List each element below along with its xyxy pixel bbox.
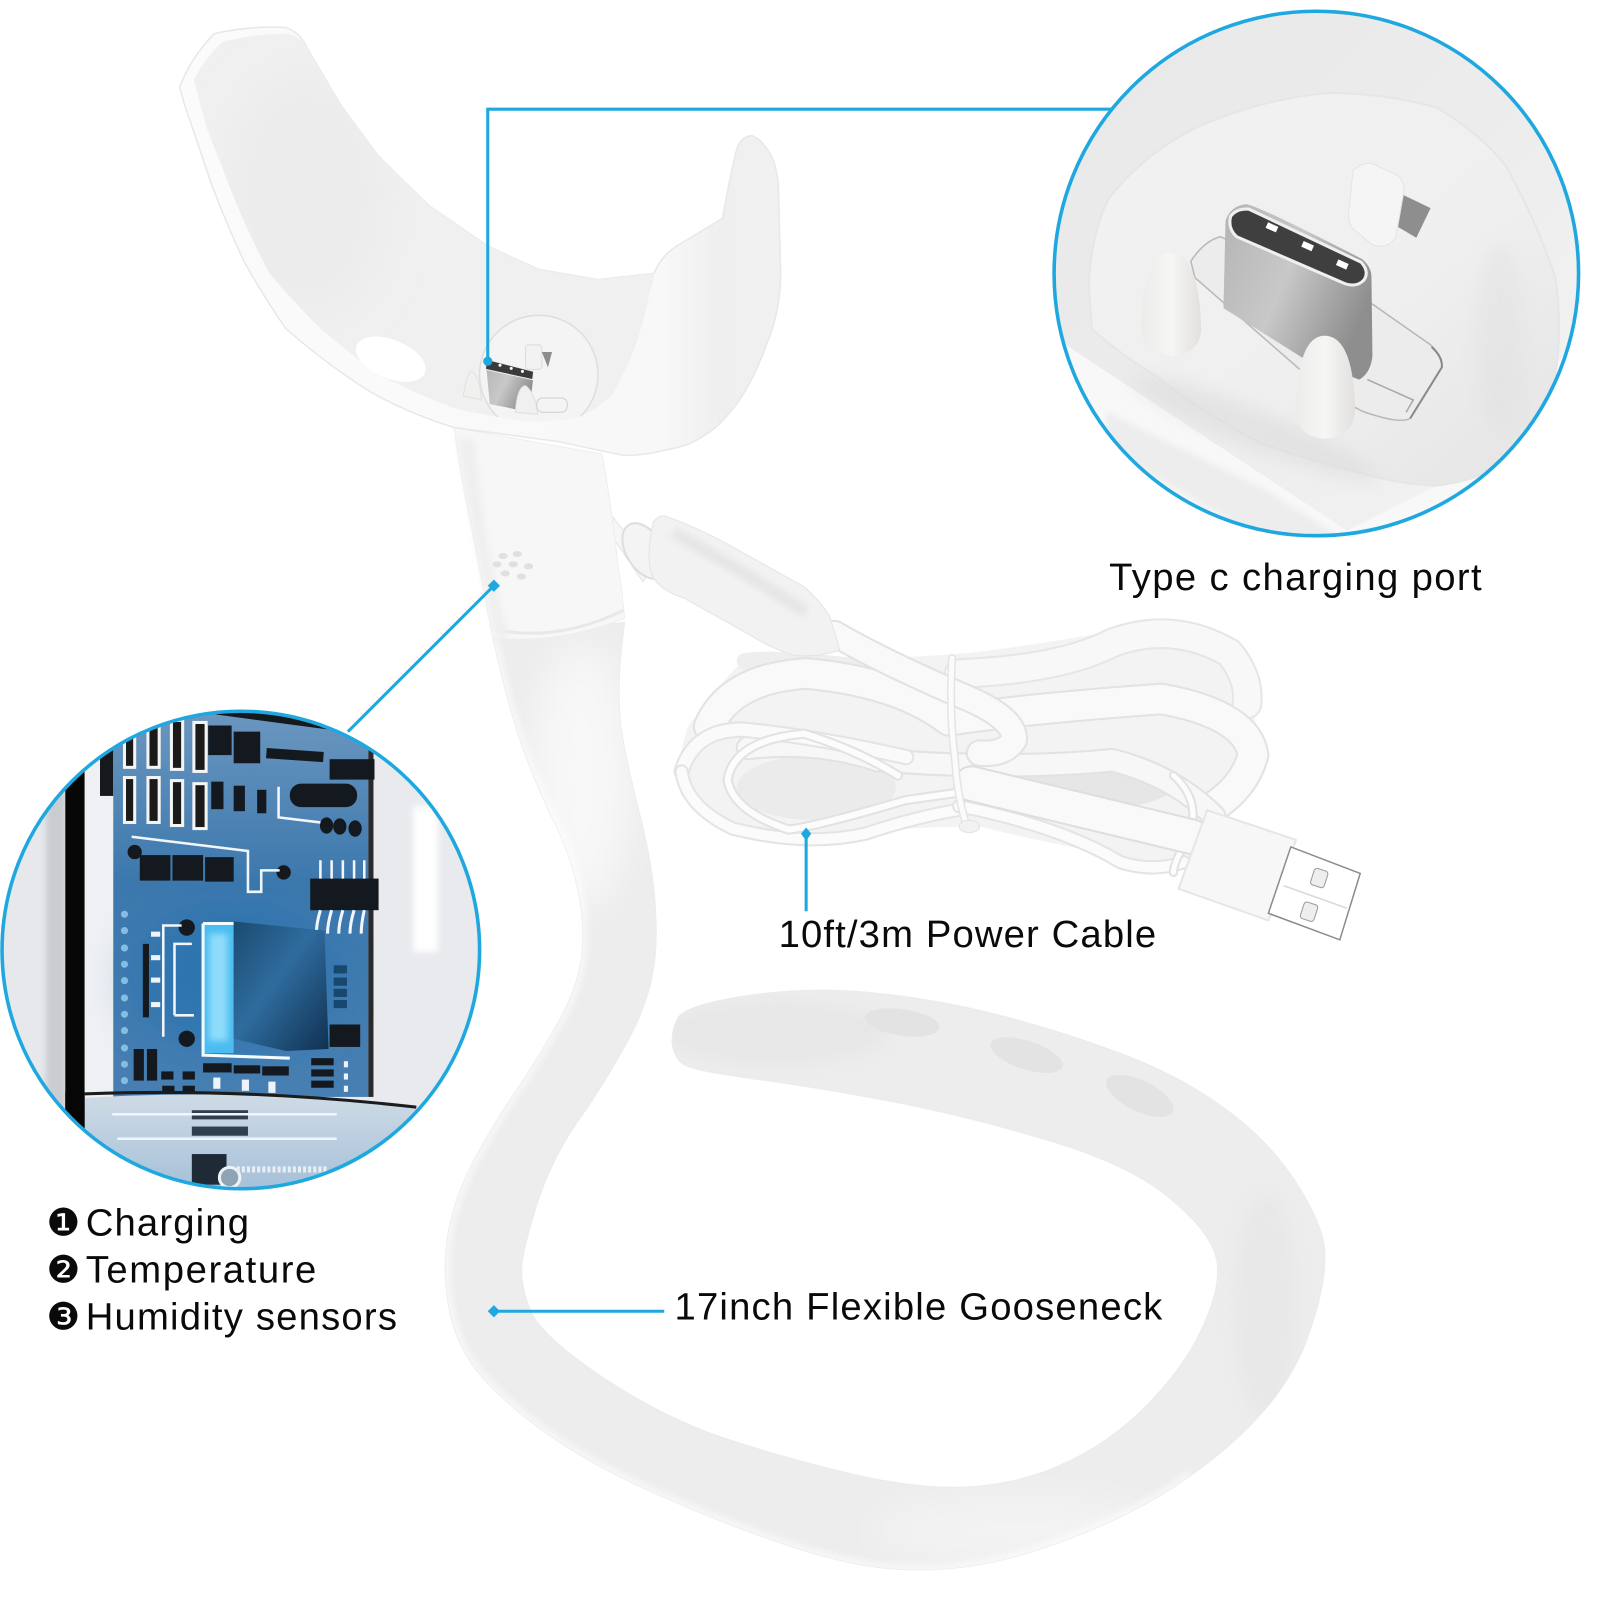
socket plate: [1191, 237, 1442, 420]
cradle oval cutout: [349, 327, 432, 391]
icon: mini guide pins: [463, 371, 567, 414]
PCB capacitor rows: [124, 714, 206, 829]
icon: left guide pin: [1187, 264, 1201, 351]
label list: sensor functions: Charging: [86, 1202, 249, 1245]
icon: mini latch: [526, 345, 552, 369]
PCB white traces: [132, 787, 364, 1037]
product: gooseneck arm: [445, 622, 1325, 1570]
cradle charging hub disc: [479, 314, 598, 417]
PCB white pads: [151, 932, 348, 1093]
product: neck stem: [454, 428, 624, 639]
cradle inner bowl: [194, 34, 653, 417]
label: 10ft/3m Power Cable: 10ft/3m Power Cable: [779, 913, 1156, 956]
label list: sensor functions: Temperature: [86, 1249, 316, 1292]
icon: right guide pin: [1296, 336, 1355, 439]
icon: gooseneck tip dimples: [863, 1004, 1180, 1126]
product: USB-A plug: [1179, 810, 1360, 940]
label: 17inch Flexible Gooseneck: 17inch Flexible Gooseneck: [674, 1285, 1163, 1328]
panel: circuit board detail circle: [0, 704, 496, 1204]
label: Type c charging port: Type c charging port: [1109, 556, 1482, 599]
callout line: sensor to circuit circle: [348, 580, 500, 732]
label list: sensor functions: Humidity sensors: [86, 1296, 397, 1339]
panel: USB-C port detail circle: [1054, 11, 1592, 571]
product: monitor cradle: [173, 20, 781, 455]
icon: USB-C connector: [1223, 204, 1372, 380]
callout line: gooseneck: [488, 1305, 664, 1317]
label list: sensor functions: ❸: [46, 1295, 80, 1339]
PCB panel: [113, 704, 368, 1097]
PCB via dots: [121, 911, 128, 1084]
product: coiled power cable: [680, 628, 1256, 872]
icon: port latch: [1349, 163, 1431, 246]
label list: sensor functions: [46, 1201, 397, 1339]
label list: sensor functions: ❷: [46, 1248, 80, 1292]
PCB main chip with glow: [203, 921, 347, 1058]
glass lower section: [84, 1090, 416, 1187]
product: cable overmold plug: [608, 515, 840, 656]
PCB dark components: [128, 726, 379, 1094]
icon: sensor vent holes: [492, 551, 533, 580]
icon: mini USB-C connector: [486, 359, 534, 410]
callout line: power cable: [801, 828, 811, 911]
port dish: [1376, 202, 1560, 487]
callout line: Type-C port to detail circle: [483, 109, 1113, 366]
label list: sensor functions: ❶: [46, 1201, 80, 1245]
